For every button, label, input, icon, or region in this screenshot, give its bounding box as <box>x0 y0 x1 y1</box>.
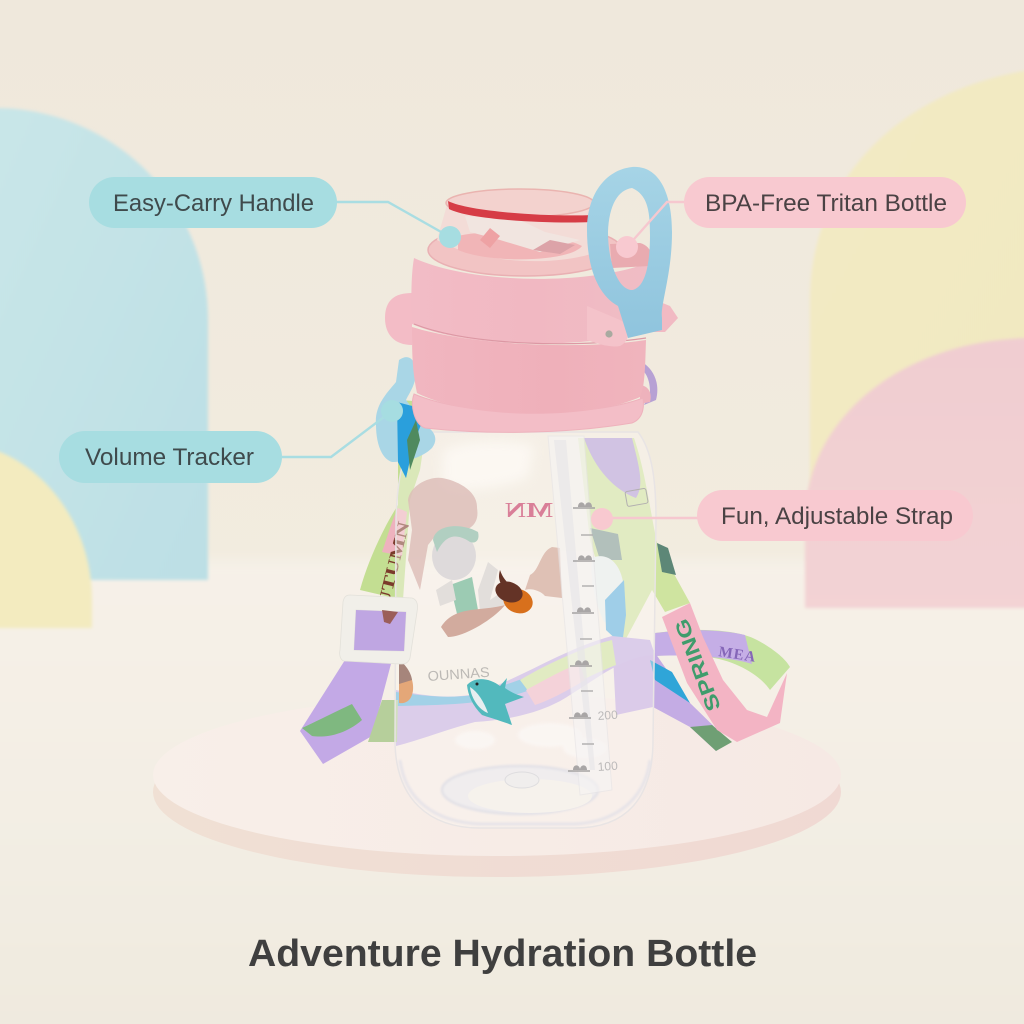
strap: left lower run <box>300 660 398 764</box>
print: bottle logotype: OUNNAS <box>427 664 490 684</box>
scale: leaf marks <box>573 502 592 770</box>
lid: hinge bracket <box>587 306 628 346</box>
buckle: purple strap inside <box>354 610 406 651</box>
display plate <box>153 694 841 877</box>
strap loop, right of lid <box>640 362 657 405</box>
icon: acorn <box>492 570 536 617</box>
tritan pin through handle <box>610 243 652 268</box>
icon: bird <box>467 678 524 725</box>
strap: left upper run with AUTUMN print <box>360 400 430 626</box>
strap: lower purple run, right <box>612 636 732 751</box>
callout leader lines <box>282 202 698 518</box>
strap: rear band with SUMMER print <box>655 630 790 690</box>
callout: Volume Tracker <box>59 431 282 483</box>
strap: descending green run, right <box>578 438 690 650</box>
callout dot: tracker <box>381 400 403 422</box>
print: brand lettering mirrored: MN <box>505 498 553 522</box>
panel: small yellow arch <box>0 450 92 628</box>
strap: pink SPRING end <box>662 603 787 742</box>
bottle lid <box>385 189 678 432</box>
strap: horizontal band through bottle <box>396 636 655 746</box>
lid: left hinge <box>385 293 412 345</box>
print: rabbit head <box>432 532 476 580</box>
callout: Fun, Adjustable Strap: Fun, Adjustable Strap <box>721 503 953 530</box>
bottle body <box>395 432 656 828</box>
lid: upper band <box>411 258 651 344</box>
lid: collar ring <box>412 394 643 432</box>
print: rabbit body <box>450 577 478 618</box>
clear top cap <box>428 189 622 276</box>
callout: Volume Tracker: Volume Tracker <box>85 444 254 471</box>
scale: 200 label: 200 <box>597 708 619 723</box>
strap buckle <box>340 595 417 664</box>
callout: Easy-Carry Handle <box>89 177 337 228</box>
background wall <box>0 0 1024 600</box>
print: tree right <box>525 547 562 598</box>
callout: BPA-Free Tritan Bottle <box>684 177 966 228</box>
bottle base ring <box>442 766 598 814</box>
print: rabbit arm and leg <box>436 562 505 612</box>
callout: BPA-Free Tritan Bottle: BPA-Free Tritan Bottle <box>705 190 947 217</box>
callout: Easy-Carry Handle: Easy-Carry Handle <box>113 190 314 217</box>
scale: 100 label: 100 <box>597 759 619 774</box>
scale: capacity badge <box>625 488 648 507</box>
scale: minor ticks <box>580 535 594 744</box>
strap: left upper run with AUTUMN print: AUTUMN <box>369 519 414 626</box>
print: swing board <box>441 605 505 637</box>
callout dot: handle <box>439 226 461 248</box>
bottle base nub <box>505 772 539 788</box>
callout dot: tritan <box>616 236 638 258</box>
bottle base highlight <box>468 779 592 813</box>
title: Adventure Hydration Bottle <box>248 933 757 975</box>
strap: all lengths behind the clear bottle <box>300 400 790 764</box>
panel: large yellow arch <box>810 70 1024 490</box>
strap: rear band with SUMMER print: MEA <box>717 644 757 666</box>
strap anchor clip, left <box>376 357 435 478</box>
lid: right wing <box>650 298 678 332</box>
scale: major ticks <box>568 508 595 771</box>
panel: blue arch <box>0 108 208 580</box>
bottle print: character scene <box>408 478 562 684</box>
floor <box>0 560 1024 1024</box>
volume tracker scale <box>548 436 648 795</box>
strap: pink SPRING end: SPRING <box>671 615 726 714</box>
callout: Fun, Adjustable Strap <box>697 490 973 541</box>
icon: second acorn behind bottle wall <box>399 660 413 703</box>
faint clouds <box>455 723 607 758</box>
print: rabbit hat <box>433 526 479 552</box>
panel: pink arch <box>805 338 1024 608</box>
print: tree canopy <box>408 478 477 590</box>
easy-carry handle <box>587 167 672 338</box>
callout dot: strap <box>591 508 613 530</box>
lid: lower band <box>412 327 646 414</box>
